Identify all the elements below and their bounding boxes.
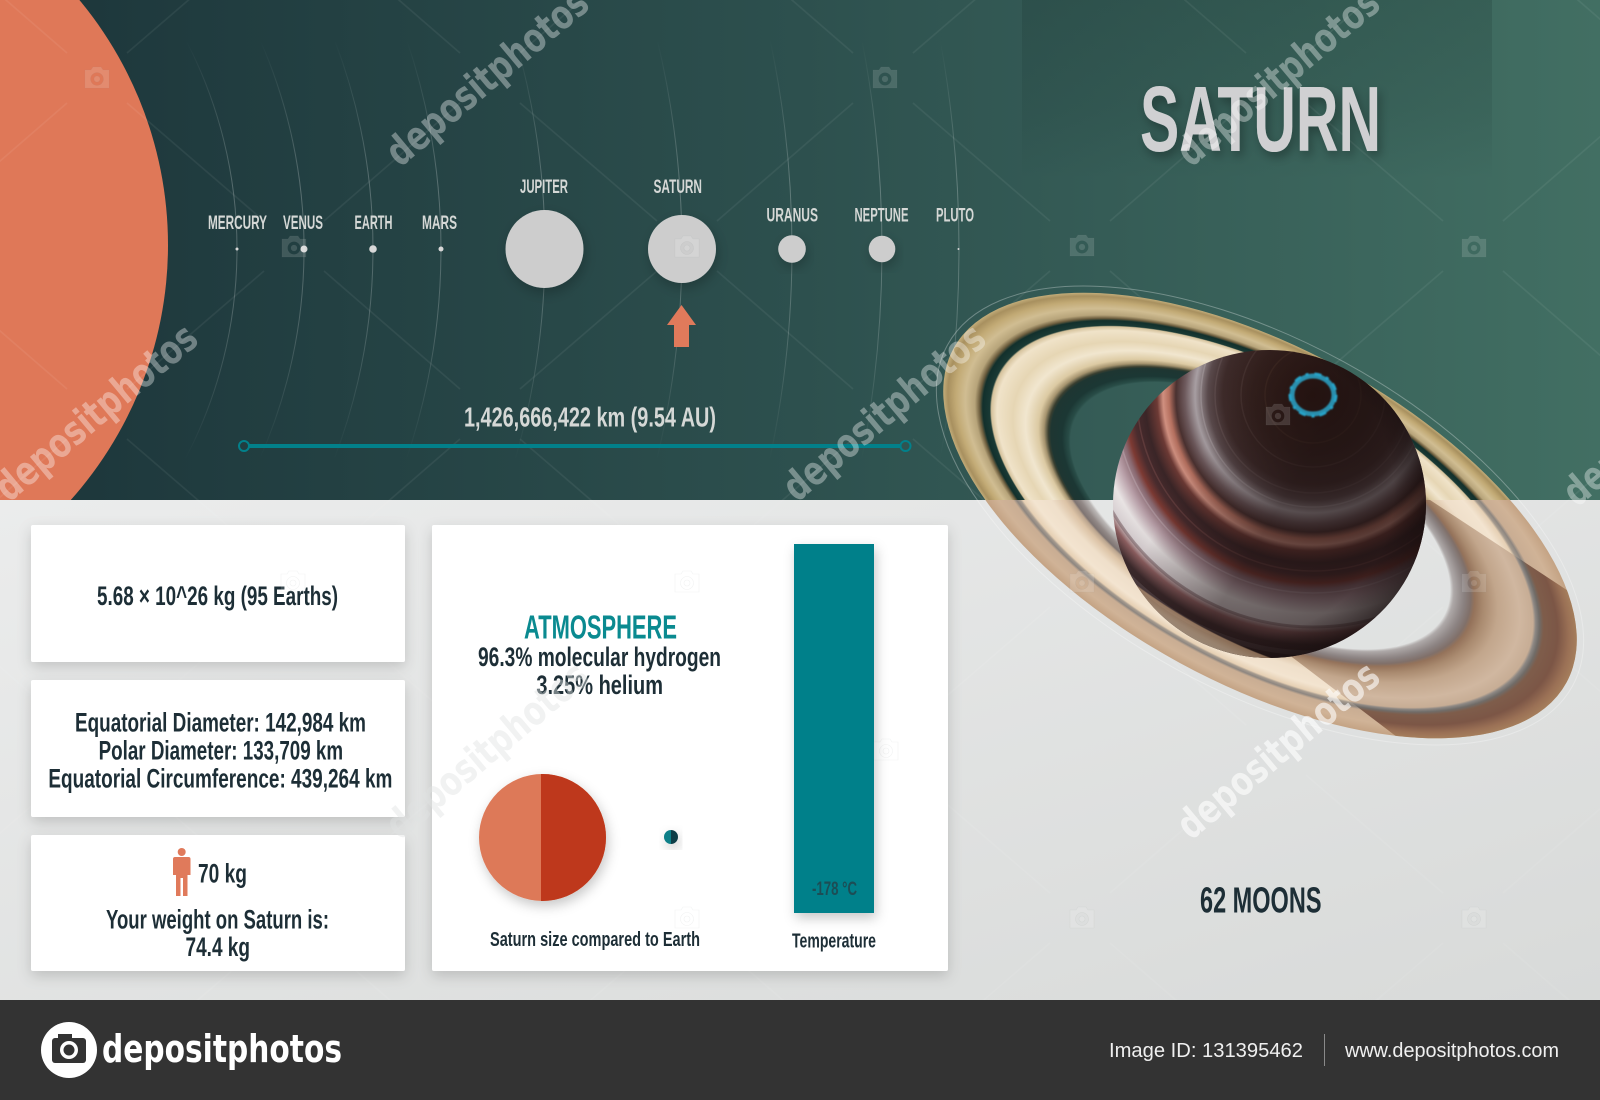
dimensions card [31, 680, 405, 817]
title backdrop block [1022, 0, 1492, 180]
atmosphere composition [478, 642, 721, 700]
planet: Earth: EARTH [354, 212, 392, 234]
size comparison: Saturn disc [479, 774, 606, 901]
planet: Saturn: SATURN [654, 176, 702, 198]
title: SATURN [1140, 67, 1381, 171]
dimensions card: Polar Diameter: 133,709 km [99, 735, 343, 765]
planet: Neptune: NEPTUNE [854, 205, 908, 227]
atmosphere composition: 3.25% helium [536, 670, 663, 700]
planet: Pluto: PLUTO [936, 205, 974, 227]
planet: Mercury [208, 212, 267, 250]
weight card: 70 kg [198, 859, 247, 889]
watermark text: depositphotos [1168, 653, 1389, 849]
footer logo wordmark: depositphotos [102, 1027, 342, 1071]
planet: Venus: VENUS [283, 212, 323, 234]
planet: Uranus [766, 205, 818, 263]
planet: Saturn [648, 176, 716, 283]
temperature caption: Temperature [792, 930, 876, 953]
weight card: Your weight on Saturn is: [106, 904, 329, 934]
atmosphere composition: 96.3% molecular hydrogen [478, 642, 721, 672]
watermark text: depositphotos [377, 653, 598, 849]
planet: Pluto [936, 205, 974, 250]
planet: Uranus: URANUS [766, 205, 818, 227]
size comparison caption: Saturn size compared to Earth [490, 928, 700, 951]
weight card: 74.4 kg [186, 932, 250, 962]
website: www.depositphotos.com [1344, 1040, 1559, 1062]
distance scale line [239, 441, 910, 451]
planet: Mars [422, 212, 457, 252]
footer bar [0, 1000, 1600, 1100]
temperature bar [794, 544, 874, 913]
planet: Neptune [854, 205, 908, 262]
atmosphere heading: ATMOSPHERE [524, 610, 677, 647]
watermark text [0, 0, 1600, 849]
watermark: small camera marks [85, 67, 1486, 928]
temperature value: -178 °C [812, 879, 857, 900]
size comparison: Earth disc [664, 830, 678, 844]
planet: Mars: MARS [422, 212, 457, 234]
aurora ring [1290, 374, 1336, 416]
icon: person [173, 848, 190, 896]
solar system planets row [208, 176, 974, 288]
mass card [31, 525, 405, 662]
image id: Image ID: 131395462 [1109, 1040, 1303, 1062]
weight card [31, 835, 405, 971]
mass card: 5.68 × 10^26 kg (95 Earths) [97, 581, 338, 611]
footer logo icon [41, 1022, 97, 1078]
dimensions card: Equatorial Diameter: 142,984 km [75, 708, 366, 738]
dimensions card: Equatorial Circumference: 439,264 km [48, 763, 392, 793]
front ring passing over the globe [1136, 585, 1272, 658]
atmosphere and comparison panel [432, 525, 948, 971]
planet: Jupiter: JUPITER [520, 176, 568, 198]
planet: Earth [354, 212, 392, 253]
planet globe [1113, 350, 1426, 658]
watermark text: depositphotos [774, 315, 995, 511]
background: dark teal header [0, 0, 1600, 500]
moons count: 62 MOONS [1200, 880, 1322, 920]
planet: Mercury: MERCURY [208, 212, 267, 234]
planet: Venus [283, 212, 323, 252]
illustration: Saturn with rings [936, 286, 1584, 746]
distance label: 1,426,666,422 km (9.54 AU) [464, 402, 716, 433]
background: light grey lower area [0, 500, 1600, 1000]
sun disc [0, 0, 168, 500]
planet: Jupiter [506, 176, 584, 288]
arrow pointing at Saturn [667, 305, 696, 347]
